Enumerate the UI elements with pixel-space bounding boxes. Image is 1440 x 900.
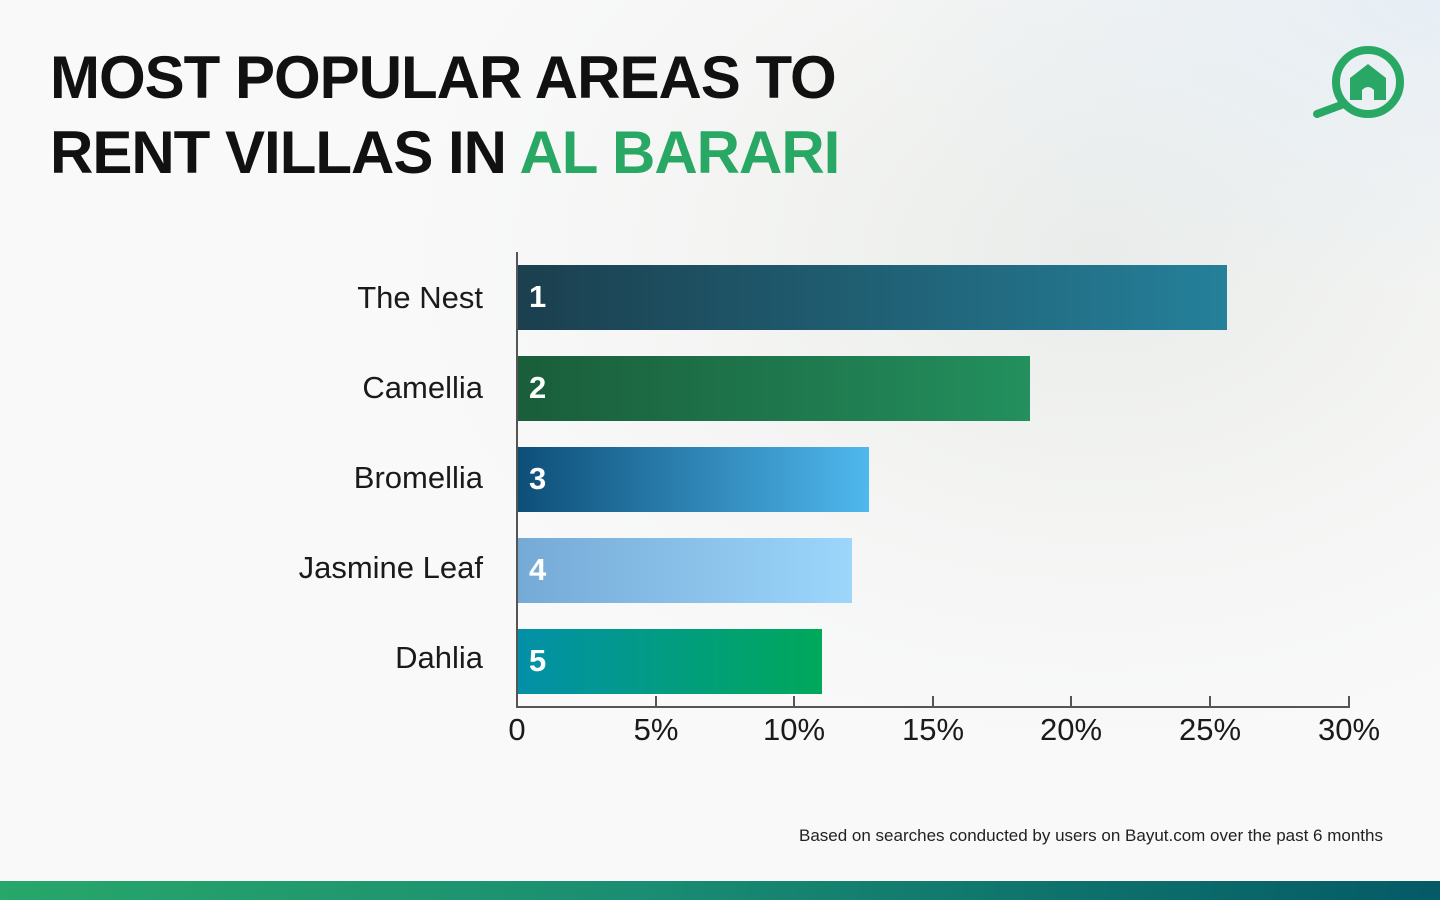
- title: RENT VILLAS IN AL BARARI: [50, 119, 839, 186]
- bar 4: 4: [529, 552, 546, 587]
- label: Camellia: Camellia: [362, 370, 483, 405]
- axis: [516, 252, 518, 708]
- bottom band: [0, 881, 1440, 900]
- bar 5: 5: [529, 643, 546, 678]
- bar 2: [517, 356, 1030, 421]
- bar 1: 1: [529, 279, 546, 314]
- bar chart: 0: [508, 712, 526, 747]
- bar 5: [517, 629, 822, 694]
- icon: logo magnifier house: [1313, 46, 1404, 118]
- bar chart: 30%: [1318, 712, 1380, 747]
- label: Jasmine Leaf: Jasmine Leaf: [299, 550, 483, 585]
- bar chart: 15%: [902, 712, 964, 747]
- label: Dahlia: Dahlia: [395, 640, 483, 675]
- bar 1: [517, 265, 1227, 330]
- bar 2: 2: [529, 370, 546, 405]
- axis labels: [508, 712, 1380, 747]
- bar 3: 3: [529, 461, 546, 496]
- title: [50, 44, 839, 186]
- bar chart: 25%: [1179, 712, 1241, 747]
- label: Bromellia: Bromellia: [354, 460, 483, 495]
- bar 4: [517, 538, 852, 603]
- title: MOST POPULAR AREAS TO: [50, 44, 836, 111]
- footnote: Based on searches conducted by users on Bayut.com over the past 6 months: [799, 826, 1383, 845]
- bar chart: 10%: [763, 712, 825, 747]
- label: The Nest: The Nest: [357, 280, 483, 315]
- bar 3: [517, 447, 869, 512]
- bar chart: 5%: [634, 712, 678, 747]
- bar chart: 20%: [1040, 712, 1102, 747]
